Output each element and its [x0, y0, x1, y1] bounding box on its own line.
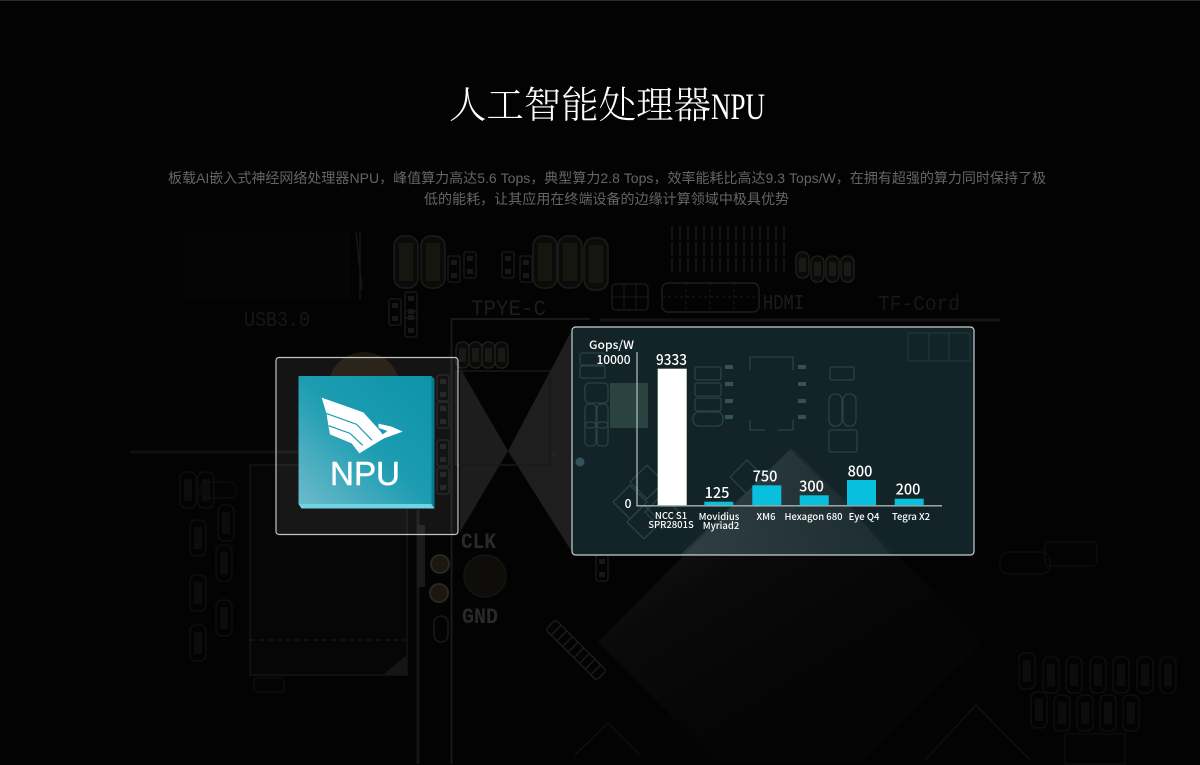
title: NPU — [711, 87, 765, 128]
icon: NPU block — [298, 376, 434, 508]
board silkscreen labels: GND — [462, 605, 498, 630]
bar: XM6: 750 — [753, 466, 777, 486]
panel frame — [276, 358, 458, 534]
axis labels: 10000 — [596, 351, 631, 368]
bar: Tegra X2: 200 — [896, 478, 920, 500]
small parts beside NPU panel — [437, 375, 449, 494]
bar: Movidius Myriad2: Movidius — [699, 509, 740, 523]
bar: NCC S1 SPR2801S: NCC S1 — [655, 508, 687, 522]
board traces — [130, 232, 1030, 764]
bar: Movidius Myriad2: 125 — [705, 482, 729, 503]
circuit board background — [130, 226, 1176, 764]
board silkscreen labels: USB3.0 — [244, 310, 310, 333]
bar: NCC S1 SPR2801S: 9333 — [656, 349, 687, 370]
bar: Movidius Myriad2 — [699, 482, 740, 532]
board silkscreen labels: TPYE-C — [471, 297, 546, 322]
bar: NCC S1 SPR2801S — [648, 349, 694, 531]
description text — [168, 170, 1046, 207]
faint board detail inside panel — [576, 333, 970, 555]
capacitors top row — [389, 236, 608, 368]
bar: Hexagon 680: Hexagon 680 — [784, 509, 842, 523]
axes — [637, 352, 942, 506]
connector row near HDMI — [612, 226, 854, 312]
panel: efficiency chart — [572, 327, 974, 555]
test points — [417, 525, 506, 642]
bar: XM6 — [752, 466, 781, 523]
bar: Tegra X2 — [892, 478, 930, 523]
bar: NCC S1 SPR2801S: SPR2801S — [648, 517, 694, 531]
description text: 板载AI嵌入式神经网络处理器NPU，峰值算力高达5.6 Tops，典型算力2.8 Tops，效率能耗比高达9.3 Tops/W，在拥有超强的算力同时保持了极 — [168, 170, 1046, 186]
description text: 低的能耗，让其应用在终端设备的边缘计算领域中极具优势 — [424, 191, 789, 207]
board chips and shapes — [184, 232, 983, 764]
capacitor banks bottom right — [596, 542, 1176, 764]
board silkscreen labels: HDMI — [763, 293, 804, 316]
bar: Hexagon 680 — [784, 476, 842, 523]
board silkscreen labels: TF-Cord — [878, 294, 960, 317]
title: 人工智能处理器 — [449, 75, 711, 129]
NPU label: NPU — [330, 456, 400, 493]
chart frame — [572, 327, 974, 555]
panel: NPU chip — [276, 358, 458, 534]
bar: Hexagon 680: 300 — [799, 476, 824, 496]
board silkscreen labels — [244, 293, 960, 630]
bar: Eye Q4: 800 — [848, 460, 872, 482]
axis labels: 0 — [625, 495, 632, 512]
bar: Movidius Myriad2: Myriad2 — [703, 518, 739, 532]
bar: Eye Q4 — [847, 460, 880, 523]
icon: eagle logo — [322, 398, 403, 453]
bar: Tegra X2: Tegra X2 — [892, 509, 930, 523]
bar: XM6: XM6 — [757, 509, 776, 523]
bar: Eye Q4: Eye Q4 — [849, 509, 880, 523]
diagonal connector — [546, 620, 606, 680]
board silkscreen labels: CLK — [461, 530, 497, 555]
top edge line — [0, 0, 1200, 1]
components left of chip — [180, 472, 284, 692]
axis labels — [589, 337, 634, 512]
axis labels: Gops/W — [589, 337, 634, 353]
